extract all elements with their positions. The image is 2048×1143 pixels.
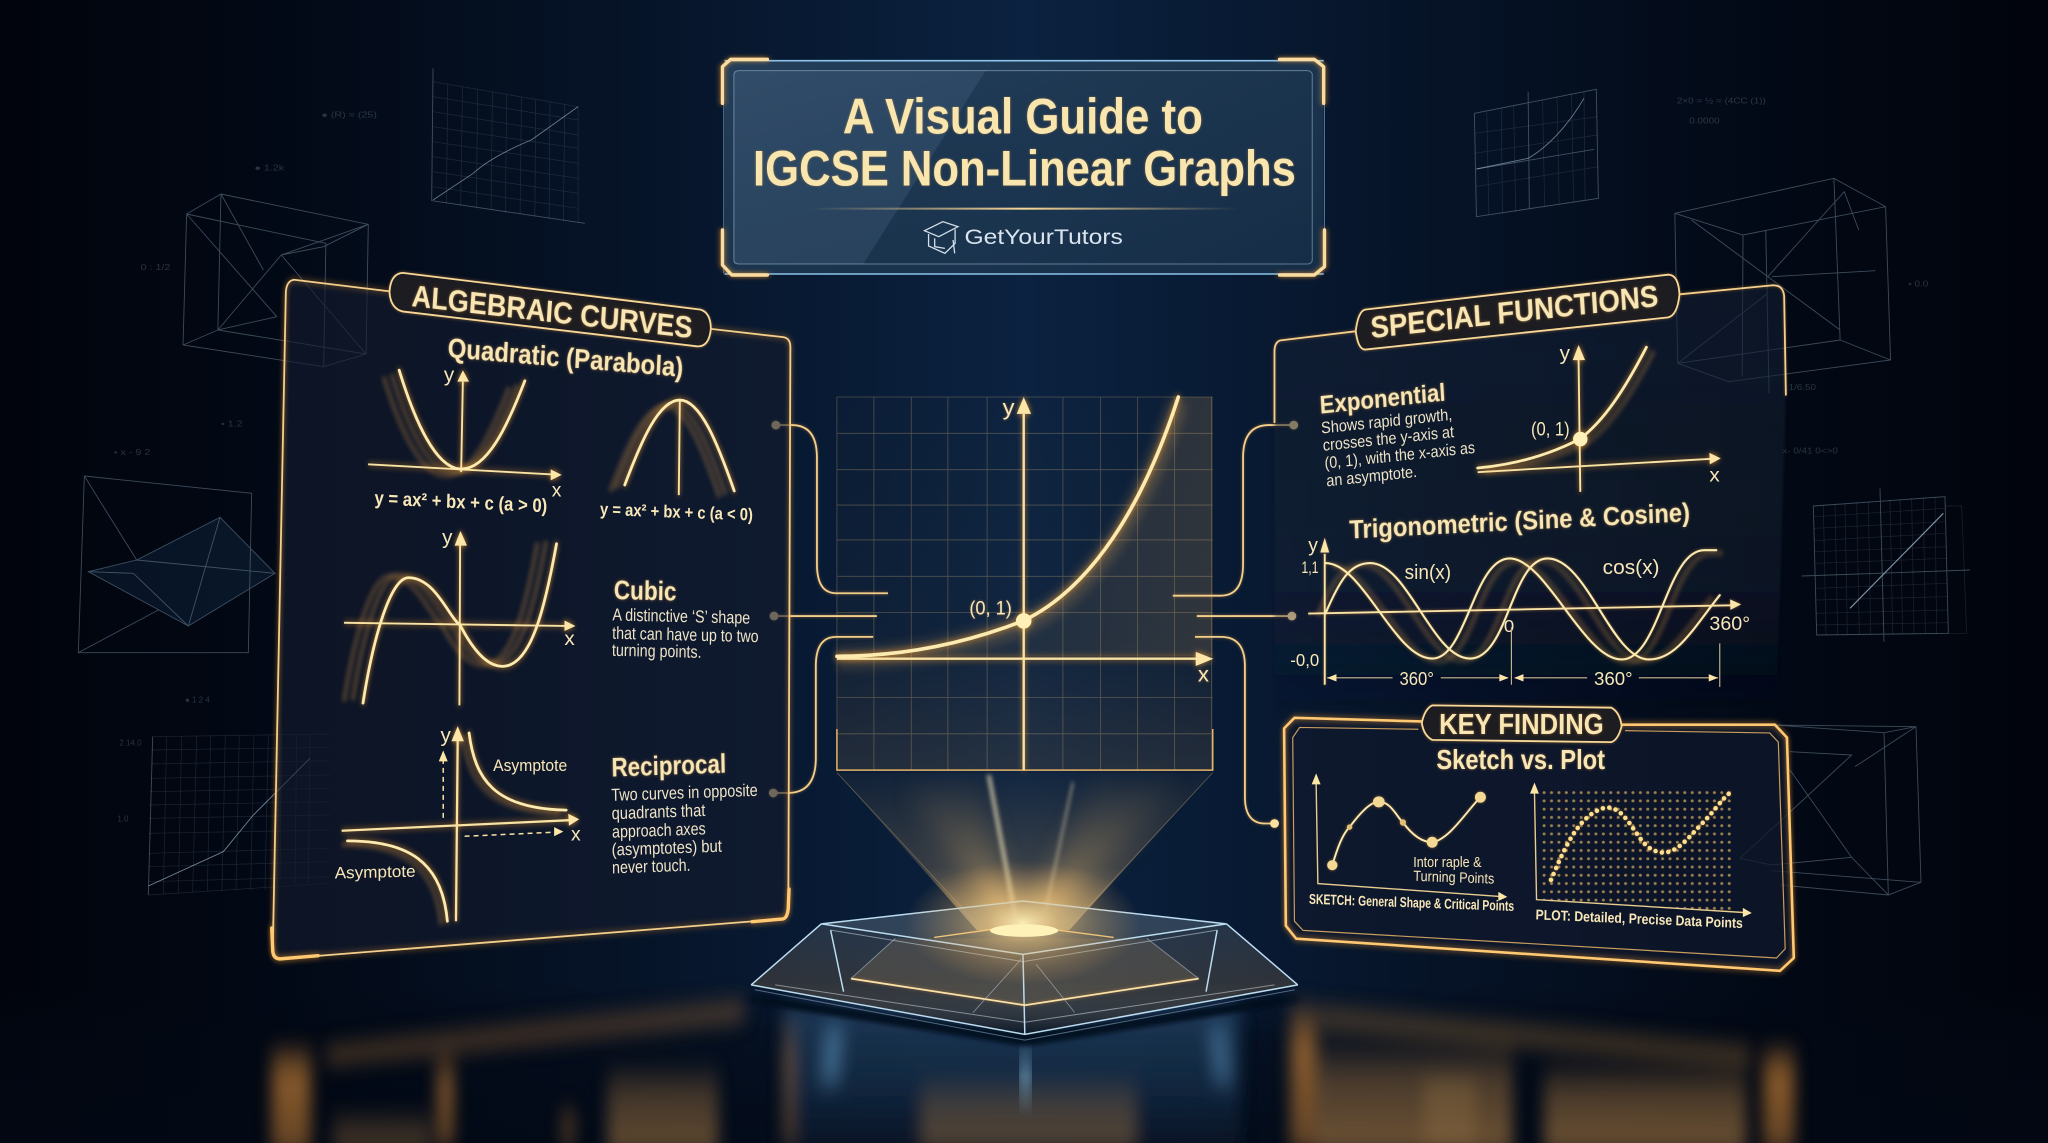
background: wireframe diamond left: ● 1 2 4 xyxy=(185,696,210,705)
subheading: quadratic: Quadratic (Parabola) xyxy=(447,334,684,384)
text: cubic: Cubic xyxy=(614,575,677,606)
chart: sketch: Intor raple & xyxy=(1413,853,1482,870)
key finding frame xyxy=(1284,718,1794,971)
background: wireframe cube top right: 0.0000 xyxy=(1689,116,1720,125)
text: reciprocal xyxy=(610,748,759,878)
period dimension lines xyxy=(1327,627,1720,690)
text: reciprocal: Reciprocal xyxy=(611,749,726,782)
icon: graduation cap logo xyxy=(924,222,958,253)
chart: exponential xyxy=(1478,342,1721,492)
central graph labels: x xyxy=(1198,663,1210,687)
central exponential graph xyxy=(837,397,1213,770)
background: small line graph right xyxy=(1802,488,1970,642)
hologram beam xyxy=(837,773,1213,930)
text: exponential: an asymptote. xyxy=(1326,463,1418,491)
title divider xyxy=(810,208,1239,210)
panel: special functions xyxy=(1274,275,1794,971)
connectors xyxy=(769,421,1298,828)
background: wireframe cube left: 0 : 1/2 xyxy=(141,263,170,273)
chart: parabola a > 0: y xyxy=(444,364,454,386)
text: cubic: that can have up to two xyxy=(612,624,759,647)
background: wireframe cube left xyxy=(114,111,377,458)
background: wireframe cube left: • x - 9 2 xyxy=(114,448,150,458)
title text: A Visual Guide to xyxy=(843,88,1203,144)
background: wireframe cube top right: 2×0 = ½ = (4CC (1)) xyxy=(1677,96,1766,105)
heading: special functions: SPECIAL FUNCTIONS xyxy=(1370,279,1659,345)
text: exponential xyxy=(1319,375,1477,491)
chart: parabola a > 0: x xyxy=(552,480,562,501)
chart: sine and cosine: 360° xyxy=(1709,613,1750,635)
heading pill xyxy=(390,273,711,346)
central graph labels xyxy=(969,396,1210,687)
glass pedestal xyxy=(751,901,1298,1040)
chart: sine and cosine: sin(x) xyxy=(1405,561,1451,584)
text: exponential: crosses the y-axis at xyxy=(1322,424,1455,455)
background: small line graph lower left xyxy=(117,734,330,895)
title text xyxy=(753,88,1296,196)
panel: key finding xyxy=(1284,705,1794,971)
panel: central hologram xyxy=(751,396,1298,1040)
title text: IGCSE Non-Linear Graphs xyxy=(753,140,1296,196)
chart: sketch xyxy=(1312,773,1507,901)
key finding background xyxy=(1284,718,1794,971)
chart: parabola a > 0 xyxy=(368,364,562,501)
title corner brackets xyxy=(722,59,1324,275)
central graph labels: y xyxy=(1003,396,1015,421)
title panel glass xyxy=(724,61,1324,274)
title panel sheen xyxy=(734,71,986,264)
panel frame xyxy=(272,280,790,959)
panel: title xyxy=(722,59,1324,275)
chart: sine and cosine xyxy=(1290,535,1750,690)
text: cubic: A distinctive ‘S’ shape xyxy=(612,606,750,628)
equation a > 0: y = ax² + bx + c (a > 0) xyxy=(374,487,548,517)
floor reflections xyxy=(272,1000,1795,1143)
text: cubic: turning points. xyxy=(612,641,702,662)
text: exponential: Exponential xyxy=(1319,378,1446,419)
chart: sine and cosine: -0,0 xyxy=(1290,651,1319,670)
background: wireframe cube top right: • 0.0 xyxy=(1908,280,1928,288)
background: small line graph lower left: 1.0 xyxy=(117,815,129,824)
light source glow xyxy=(905,860,1141,986)
text: exponential: Shows rapid growth, xyxy=(1321,406,1453,438)
background: small line graph top left xyxy=(432,68,585,223)
sketch caption: SKETCH: General Shape & Critical Points xyxy=(1309,891,1514,914)
graph grid xyxy=(837,397,1213,770)
chart: cubic: y xyxy=(442,526,453,548)
panel background xyxy=(1274,285,1786,719)
chart: sine and cosine: 1,1 xyxy=(1301,560,1319,578)
text: reciprocal: never touch. xyxy=(612,856,691,878)
subheading: trigonometric: Trigonometric (Sine & Cosine) xyxy=(1349,498,1690,544)
reflection: central light streak xyxy=(755,995,1293,1117)
background: wireframe cube left: ● 1.2k xyxy=(254,164,284,173)
background: wireframe cube top right: 1/6.50 xyxy=(1788,383,1816,392)
chart: reciprocal: Asymptote xyxy=(335,863,416,883)
period dimension lines: 360° xyxy=(1399,669,1434,690)
chart: reciprocal: y xyxy=(440,724,451,747)
chart: cubic xyxy=(344,526,575,705)
period dimension lines: 360° xyxy=(1594,669,1633,690)
chart: sketch: Turning Points xyxy=(1413,867,1495,887)
heading: key finding: KEY FINDING xyxy=(1439,709,1604,741)
chart: plot xyxy=(1530,783,1752,917)
chart: parabola a < 0 xyxy=(610,400,734,497)
text: reciprocal: Two curves in opposite xyxy=(611,781,758,805)
panel background xyxy=(273,280,790,959)
chart: sine and cosine: 0 xyxy=(1504,617,1514,636)
background: wireframe cube left: ● (R) = (25) xyxy=(321,111,377,120)
chart: exponential: y xyxy=(1560,342,1570,365)
background: wireframe cube top right: x- 0/41 0<>0 xyxy=(1782,446,1838,455)
heading: algebraic curves: ALGEBRAIC CURVES xyxy=(411,279,694,345)
background: wireframe box lower right xyxy=(1740,725,1921,895)
chart: reciprocal: Asymptote xyxy=(493,757,567,776)
chart: reciprocal: x xyxy=(571,823,581,845)
chart: cubic: x xyxy=(564,628,575,649)
background: small graph top right xyxy=(1474,89,1598,217)
panel: algebraic curves xyxy=(272,273,790,959)
equation a < 0: y = ax² + bx + c (a < 0) xyxy=(600,500,753,525)
chart: reciprocal xyxy=(335,724,581,925)
heading pill xyxy=(1422,705,1622,742)
chart: sine and cosine: y xyxy=(1308,535,1318,556)
text: exponential: (0, 1), with the x-axis as xyxy=(1324,439,1476,473)
brand name: GetYourTutors xyxy=(964,225,1123,249)
central graph labels: (0, 1) xyxy=(969,597,1012,619)
text: cubic xyxy=(612,575,759,664)
heading pill xyxy=(1356,275,1679,350)
background: small line graph lower left: 2 14.0 xyxy=(119,738,142,747)
text: reciprocal: quadrants that xyxy=(611,801,706,824)
title panel borders xyxy=(724,61,1324,274)
chart: exponential: x xyxy=(1709,464,1720,486)
background: wireframe diamond left xyxy=(78,476,275,705)
plot caption: PLOT: Detailed, Precise Data Points xyxy=(1535,907,1743,931)
background: wireframe cube left: • 1.2 xyxy=(221,420,243,429)
panel frame xyxy=(1274,285,1786,423)
chart: exponential: (0, 1) xyxy=(1531,418,1570,440)
subheading: sketch vs plot: Sketch vs. Plot xyxy=(1436,745,1605,776)
background: wireframe cube top right xyxy=(1675,96,1928,455)
chart: sine and cosine: cos(x) xyxy=(1603,556,1659,579)
text: reciprocal: (asymptotes) but xyxy=(612,837,723,860)
text: reciprocal: approach axes xyxy=(612,820,706,842)
